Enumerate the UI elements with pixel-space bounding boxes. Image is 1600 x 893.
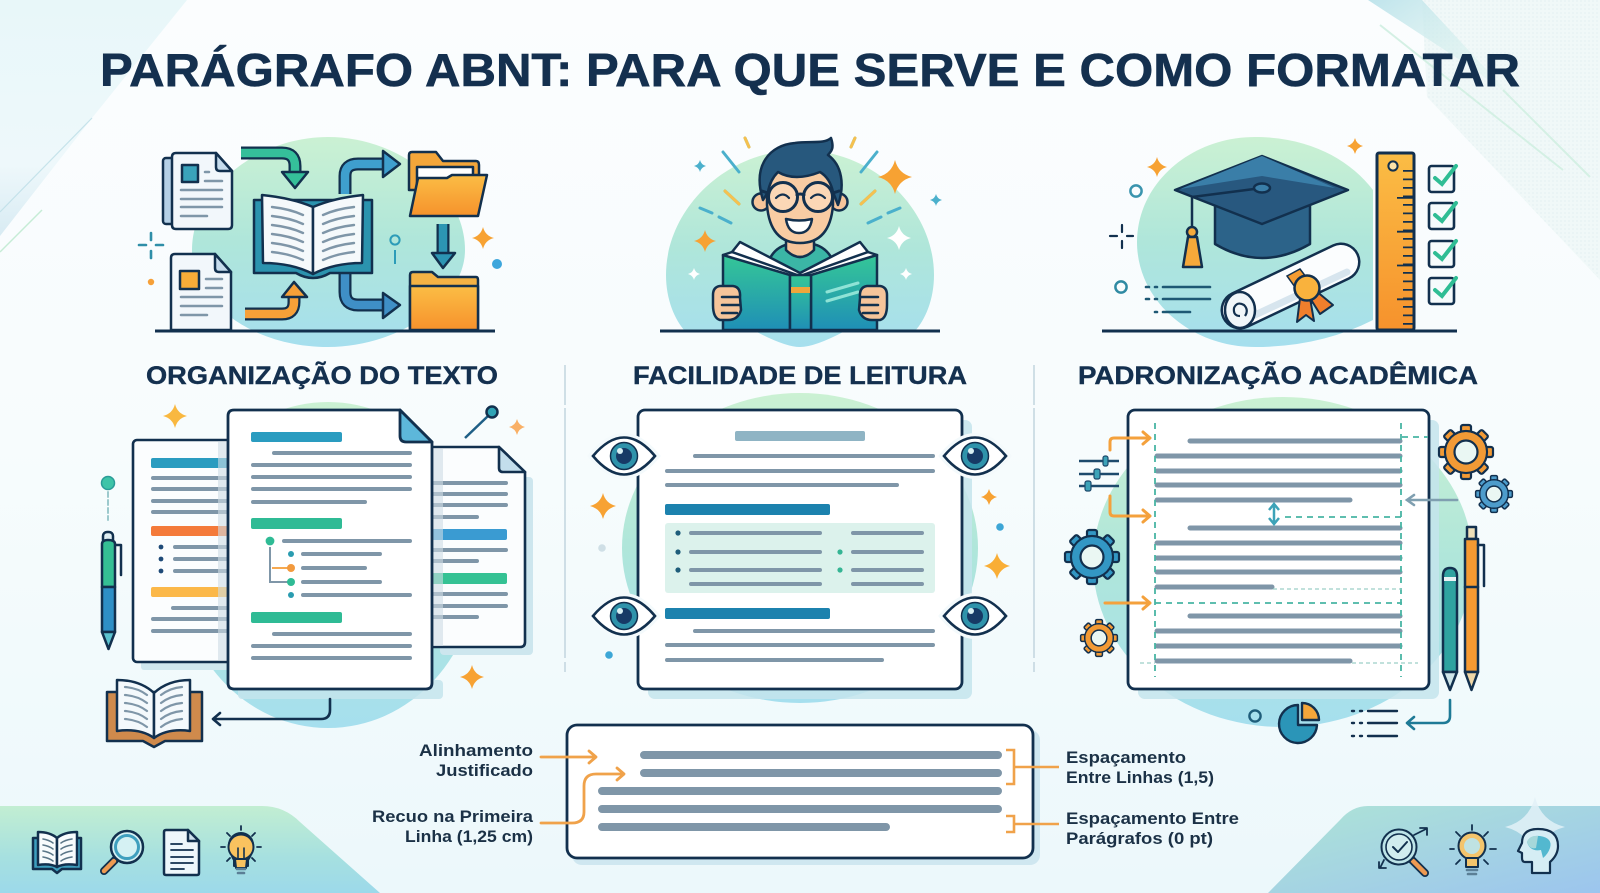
backdrop circle	[192, 137, 465, 347]
icon: magnifier with check	[1379, 828, 1427, 873]
arrow: alinhamento	[541, 751, 596, 763]
backdrop	[666, 150, 934, 347]
icon: document top	[163, 153, 232, 229]
icon: pen	[102, 476, 121, 649]
decorative sparkles and dots	[139, 227, 502, 285]
label: alinhamento: Justificado	[436, 762, 533, 780]
icon: closed folder	[410, 272, 478, 330]
bracket: espaçamento entre linhas	[1006, 750, 1059, 784]
icon: document bottom	[171, 254, 231, 330]
left page	[133, 440, 233, 670]
corner shape	[0, 806, 380, 893]
heading: organização: ORGANIZAÇÃO DO TEXTO	[146, 360, 498, 390]
right page	[430, 447, 533, 655]
icons: gears	[1065, 425, 1512, 656]
arrow: blue to top folder	[345, 151, 400, 194]
ground line	[1102, 330, 1457, 332]
panel: paragraph diagram	[372, 725, 1239, 865]
panel: organização illustration	[139, 137, 502, 347]
icon: book	[33, 832, 81, 873]
icon: diploma	[1225, 262, 1347, 328]
bracket: espaçamento entre parágrafos	[1006, 816, 1059, 832]
icon: head with brain	[1518, 829, 1558, 873]
panel: footer right	[1268, 797, 1600, 893]
page box	[567, 725, 1040, 865]
label: entre linhas: Espaçamento	[1066, 749, 1186, 767]
document	[1128, 410, 1439, 699]
ground line	[660, 330, 940, 332]
text lines	[602, 755, 998, 827]
arrow: grey margin	[1407, 495, 1457, 505]
panel: footer left	[0, 806, 380, 893]
dividers	[565, 365, 1034, 678]
label: alinhamento: Alinhamento	[419, 742, 533, 760]
icon: document	[164, 830, 199, 875]
white star	[1505, 797, 1565, 857]
backdrop	[622, 393, 978, 703]
arrow: orange to book	[245, 282, 307, 314]
icon: orange pen	[1465, 527, 1484, 690]
arrow: green to book	[241, 153, 308, 188]
hands	[713, 286, 887, 320]
sparkles and pin	[163, 404, 525, 689]
arrow: folder to folder	[432, 224, 455, 268]
icon: sliders	[1079, 456, 1119, 491]
label: entre parágrafos	[1066, 810, 1239, 848]
heading: padronização: PADRONIZAÇÃO ACADÊMICA	[1078, 360, 1478, 390]
label: entre parágrafos: Parágrafos (0 pt)	[1066, 830, 1213, 848]
open green book	[723, 242, 877, 330]
arrow: to small book	[213, 699, 330, 725]
icon: lightbulb	[221, 826, 261, 873]
character	[752, 138, 848, 275]
panel: academic illustration	[1102, 137, 1457, 347]
icon: open folder	[409, 152, 487, 216]
backdrop	[178, 402, 478, 728]
label: entre parágrafos: Espaçamento Entre	[1066, 810, 1239, 828]
label: alinhamento	[419, 742, 533, 780]
label: recuo	[372, 808, 534, 846]
backdrop	[1137, 137, 1373, 347]
label: recuo: Linha (1,25 cm)	[405, 828, 533, 846]
panel: document stack	[102, 402, 533, 747]
label: recuo: Recuo na Primeira	[372, 808, 534, 826]
decorative sparkles and lines	[1110, 138, 1363, 312]
icon: small book	[107, 680, 202, 747]
bottom mini icons	[1249, 700, 1450, 743]
arrow: recuo	[541, 768, 624, 823]
icon: eyes	[593, 438, 1006, 634]
corner shape	[1268, 806, 1600, 893]
title: PARÁGRAFO ABNT: PARA QUE SERVE E COMO FORMATAR	[100, 44, 1520, 96]
arrow: blue to bottom folder	[345, 274, 400, 318]
document	[638, 410, 972, 699]
panel: reading document	[590, 393, 1010, 703]
icon: magnifier	[104, 831, 143, 871]
panel: formatting document	[1065, 397, 1512, 743]
label: entre linhas: Entre Linhas (1,5)	[1066, 769, 1214, 787]
sparkles and dots	[590, 489, 1010, 659]
icon: teal pen	[1443, 568, 1457, 690]
backdrop	[1093, 397, 1473, 727]
icon: ruler	[1377, 153, 1414, 330]
center page	[228, 410, 443, 699]
panel: reader illustration	[660, 138, 942, 347]
heading: facilidade: FACILIDADE DE LEITURA	[633, 362, 967, 390]
arrows: orange margins	[1105, 432, 1150, 609]
rays and sparkles	[688, 138, 942, 280]
checklist	[1429, 166, 1456, 304]
label: entre linhas	[1066, 749, 1214, 787]
icon: lightbulb	[1450, 825, 1496, 874]
icon: graduation cap	[1175, 156, 1348, 267]
icon: open book	[254, 195, 372, 278]
ground line	[155, 330, 495, 332]
